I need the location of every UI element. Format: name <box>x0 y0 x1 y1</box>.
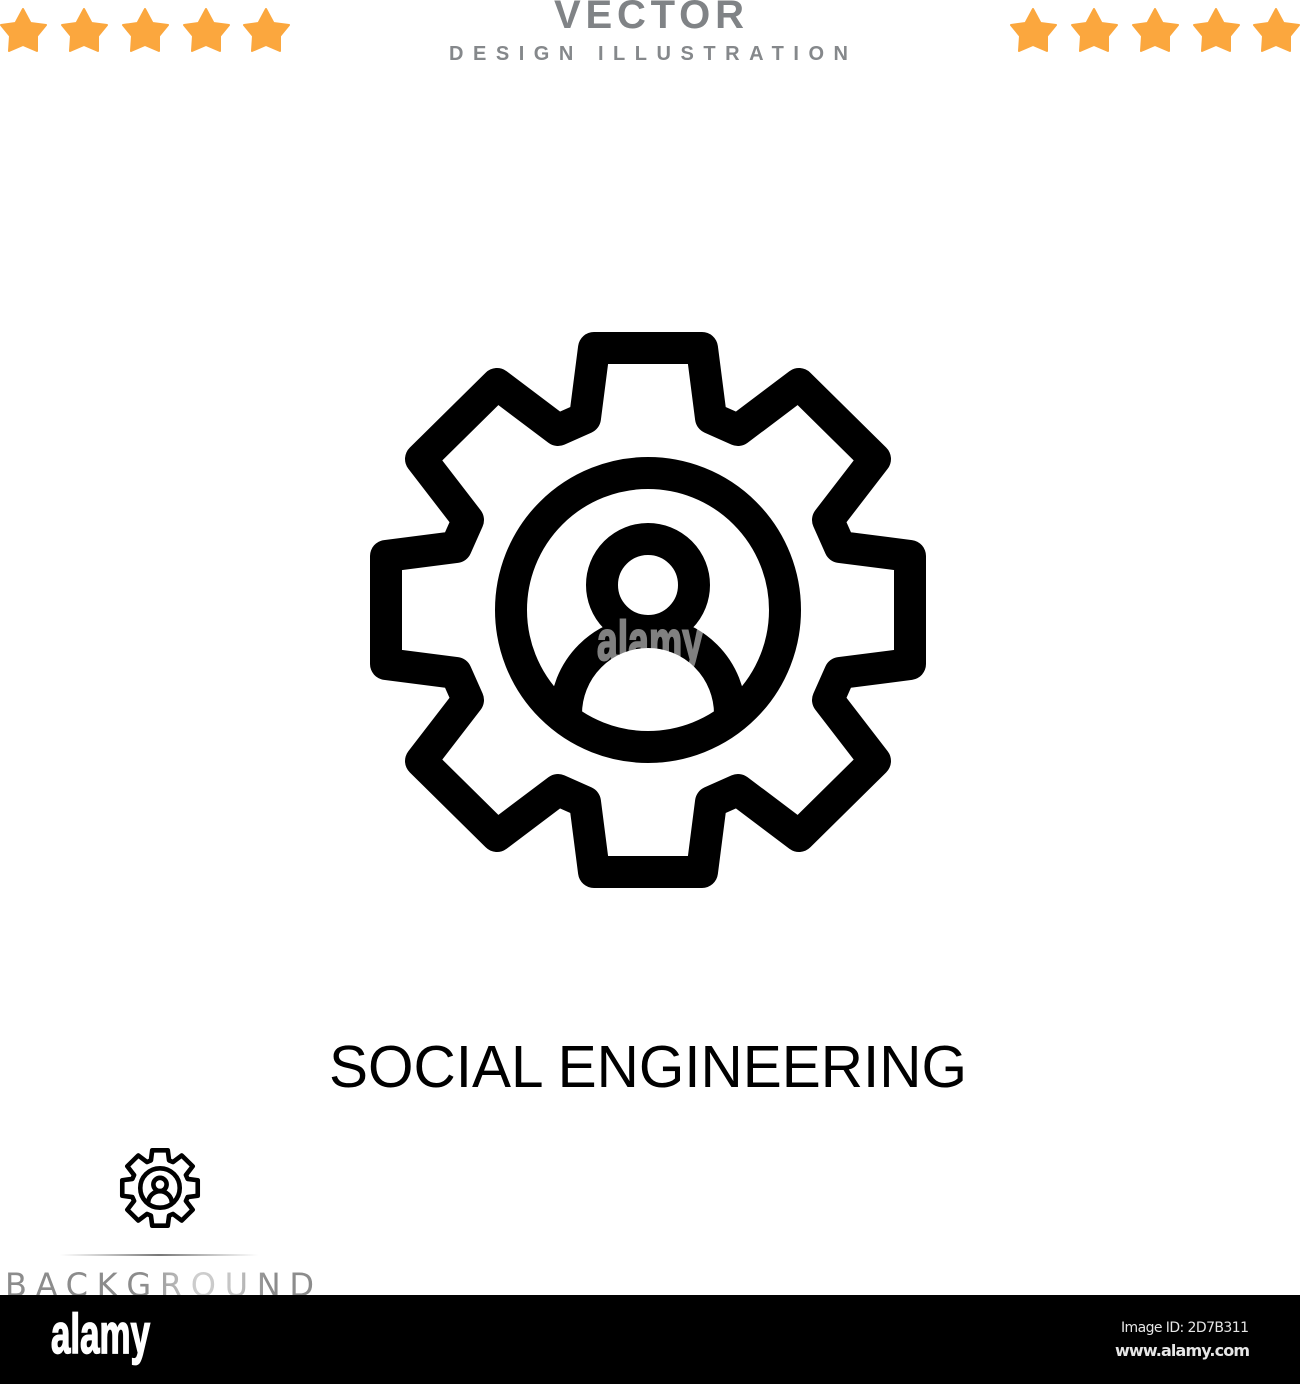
image id: Image ID: 2D7B311 <box>1121 1320 1249 1336</box>
subheading: DESIGN ILLUSTRATION: DESIGN ILLUSTRATION <box>449 43 848 65</box>
footer bar <box>0 1295 1300 1384</box>
right star rating <box>1011 9 1299 51</box>
logo: alamy: alamy <box>51 1302 150 1365</box>
watermark: alamy center: alamy <box>597 609 703 672</box>
icon: small gear with person <box>122 1150 198 1226</box>
left star rating <box>1 9 289 51</box>
website: www.alamy.com <box>1115 1341 1250 1360</box>
label: BACKGROUND: BACKGROUND <box>5 1266 314 1304</box>
inner ring <box>511 473 785 747</box>
person shoulders <box>554 627 742 712</box>
small person head <box>153 1178 167 1191</box>
icon: gear with person <box>386 348 910 872</box>
small person shoulders <box>148 1191 172 1208</box>
gear outline <box>386 348 910 872</box>
small inner ring <box>140 1168 180 1208</box>
small gear outline <box>122 1150 198 1226</box>
person head <box>602 539 694 631</box>
title: SOCIAL ENGINEERING: SOCIAL ENGINEERING <box>329 1034 967 1100</box>
